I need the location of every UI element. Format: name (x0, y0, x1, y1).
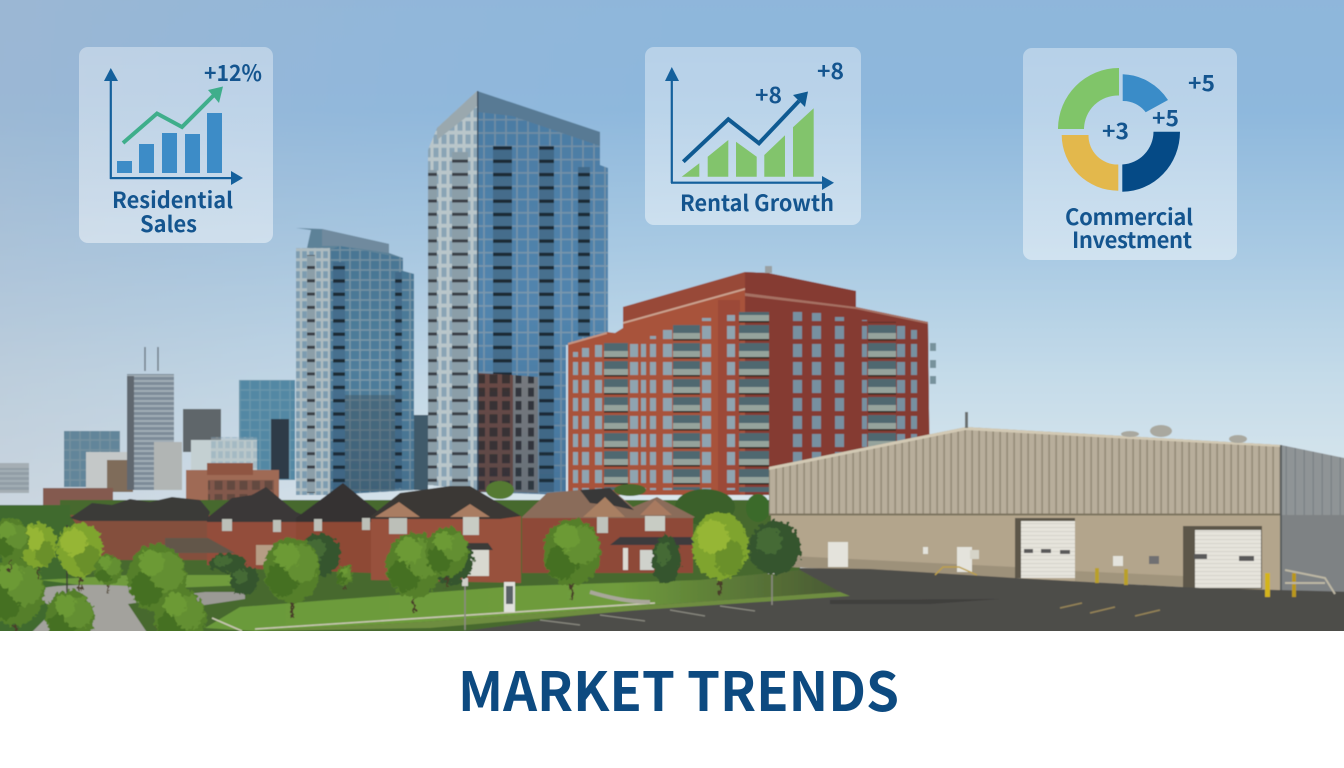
loading door 1 (1015, 518, 1075, 578)
footer band (0, 631, 1344, 768)
heading line two: investment: Investment (1072, 223, 1192, 255)
panel: rental growth (645, 47, 861, 225)
tall glass tower (428, 91, 608, 495)
parking lot (400, 567, 1344, 640)
panel: commercial investment (1023, 48, 1237, 260)
brick condo building (568, 266, 936, 495)
brick balconies (604, 312, 896, 492)
title: MARKET TRENDS (458, 648, 899, 727)
heading: commercial: Commercial (1065, 200, 1193, 232)
heading line two: Sales (140, 207, 197, 239)
trees (0, 512, 801, 662)
value: +5 outer: +5 (1188, 66, 1215, 98)
value: +8 lower: +8 (755, 78, 782, 110)
heading: rental growth: Rental Growth (680, 186, 834, 218)
distant skyline buildings (0, 347, 428, 506)
hedge and grass ground base (0, 481, 800, 632)
heading: residential sales: Residential (112, 183, 233, 215)
value: +5 inner: +5 (1152, 101, 1179, 133)
brick windows (573, 312, 917, 492)
value: +12%: +12% (204, 56, 262, 88)
lawns, road and sidewalk (28, 525, 850, 634)
panel: residential sales (79, 47, 273, 243)
service doors (828, 542, 1159, 572)
trend arrow: rental (683, 92, 808, 162)
mid glass tower (296, 228, 414, 495)
loading door 2 (1183, 526, 1262, 589)
chart axes (665, 67, 834, 190)
townhouses row (70, 483, 695, 583)
trend arrow: sales (123, 86, 223, 143)
donut chart (1058, 68, 1180, 192)
chart axes (104, 68, 243, 185)
value: +8 upper: +8 (817, 54, 844, 86)
value: +3: +3 (1102, 114, 1129, 146)
bar chart: sales bars (117, 113, 222, 173)
area chart: rental bars (682, 108, 814, 177)
warehouse (769, 412, 1344, 593)
